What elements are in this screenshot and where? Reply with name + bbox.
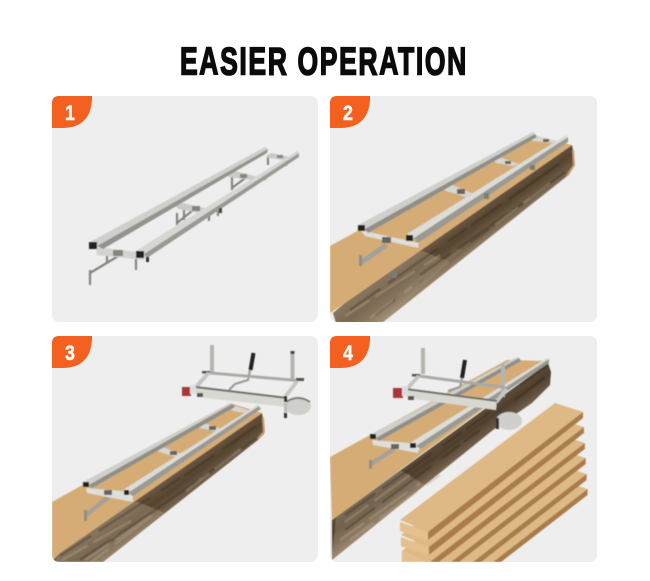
log cut surface 2 xyxy=(330,135,572,313)
step badge 1 xyxy=(52,96,92,128)
step badge 1: 1 xyxy=(65,102,75,125)
illustration: carriage above log xyxy=(52,345,311,566)
panel 2 background xyxy=(330,96,597,322)
step badge 4 xyxy=(330,336,370,368)
sawmill carriage 4 xyxy=(393,348,522,430)
illustration: assembled rail frame xyxy=(89,147,299,285)
sawmill carriage 3 xyxy=(182,345,311,418)
log bark 2 xyxy=(333,145,574,323)
infographic canvas xyxy=(52,46,597,562)
panel 1 background xyxy=(52,96,318,322)
log cut surface 3 xyxy=(52,403,262,560)
log bark 4 xyxy=(332,363,551,560)
illustration: milling log with cut boards xyxy=(330,348,588,562)
panel: step 1 xyxy=(52,96,318,322)
panel: step 3 xyxy=(52,336,318,566)
step badge 3 xyxy=(52,336,92,368)
panel 4 background xyxy=(330,336,597,562)
board stack xyxy=(400,403,588,562)
panel 3 background xyxy=(52,336,318,562)
log cut surface 4 xyxy=(330,360,548,520)
step badge 2 xyxy=(330,96,370,128)
panel: step 2 xyxy=(330,96,597,323)
step badge 4: 4 xyxy=(343,342,353,365)
log bark 3 xyxy=(53,413,264,566)
step badge 2: 2 xyxy=(343,102,353,125)
title: EASIER OPERATION xyxy=(180,41,466,84)
panel: step 4 xyxy=(330,336,597,562)
illustration: frame on log xyxy=(330,132,574,323)
step badge 3: 3 xyxy=(65,342,75,365)
